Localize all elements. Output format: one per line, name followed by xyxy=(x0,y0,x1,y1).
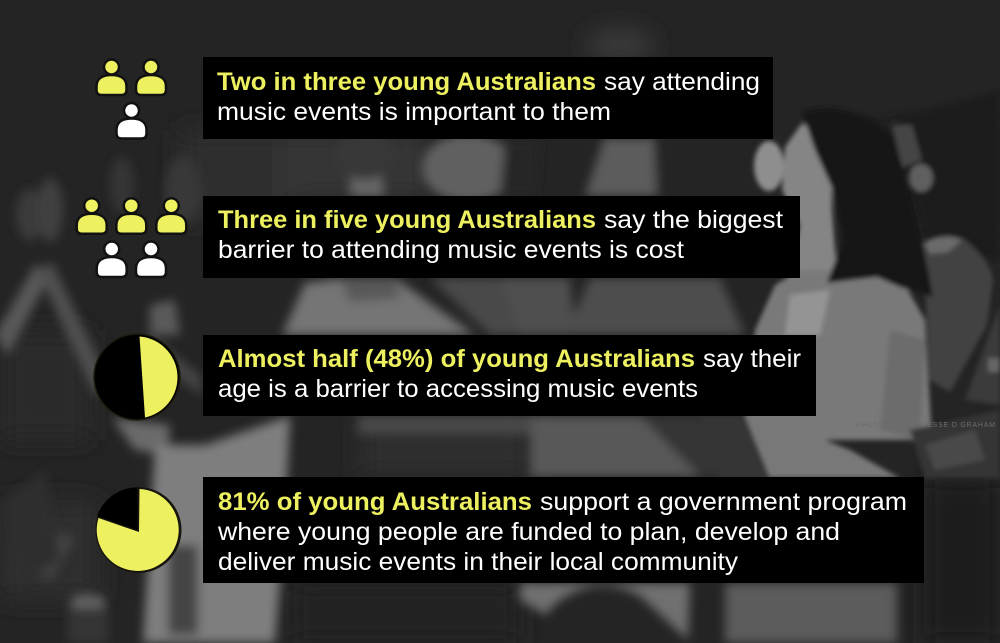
figure with white shirt xyxy=(112,418,170,455)
raised arms, left xyxy=(0,265,52,355)
crowd hands, left xyxy=(16,189,44,241)
photo credit: PHOTO CREDIT: JESSE D GRAHAM xyxy=(856,422,995,429)
raised hand xyxy=(754,141,784,191)
row 1 callout: music events is important to them xyxy=(217,98,611,126)
row 4 callout: support a government program xyxy=(540,488,907,516)
bottom garments xyxy=(520,583,690,640)
row 1 callout: Two in three young Australians xyxy=(217,68,596,96)
arms below box two xyxy=(282,278,475,335)
row 1 callout: say attending xyxy=(604,68,760,96)
row 4 callout: where young people are funded to plan, develop and xyxy=(217,518,840,546)
row 1 callout xyxy=(203,57,773,139)
torso band below box three xyxy=(358,416,530,434)
row 3 callout: say their xyxy=(703,345,801,373)
row 2 callout: barrier to attending music events is cost xyxy=(218,236,684,264)
row 3 icon: pie chart 48% xyxy=(94,334,180,420)
shirt xyxy=(745,270,932,440)
row 2 callout: say the biggest xyxy=(604,206,783,234)
ear behind woman xyxy=(909,164,933,192)
row 2 icon: three of five people xyxy=(77,198,186,277)
head behind woman xyxy=(895,90,1000,260)
row 4 callout: deliver music events in their local community xyxy=(218,548,739,576)
row 3 callout xyxy=(203,335,816,416)
row 3 callout: Almost half (48%) of young Australians xyxy=(218,345,695,373)
face and neck xyxy=(782,123,838,290)
row 4 callout xyxy=(203,477,924,583)
row 4 callout: 81% of young Australians xyxy=(218,488,532,516)
bottle xyxy=(68,590,108,643)
hair xyxy=(802,108,933,297)
forearm, lower left xyxy=(35,530,75,582)
row 3 callout: age is a barrier to accessing music events xyxy=(218,375,698,403)
top row faces xyxy=(422,134,514,202)
row 4 icon: pie chart 81% xyxy=(96,487,182,573)
row 2 callout: Three in five young Australians xyxy=(218,206,596,234)
shoulder behind woman xyxy=(923,237,993,392)
row 2 callout xyxy=(203,196,800,278)
row 1 icon: two of three people xyxy=(96,60,166,138)
arm and hands xyxy=(740,416,900,478)
